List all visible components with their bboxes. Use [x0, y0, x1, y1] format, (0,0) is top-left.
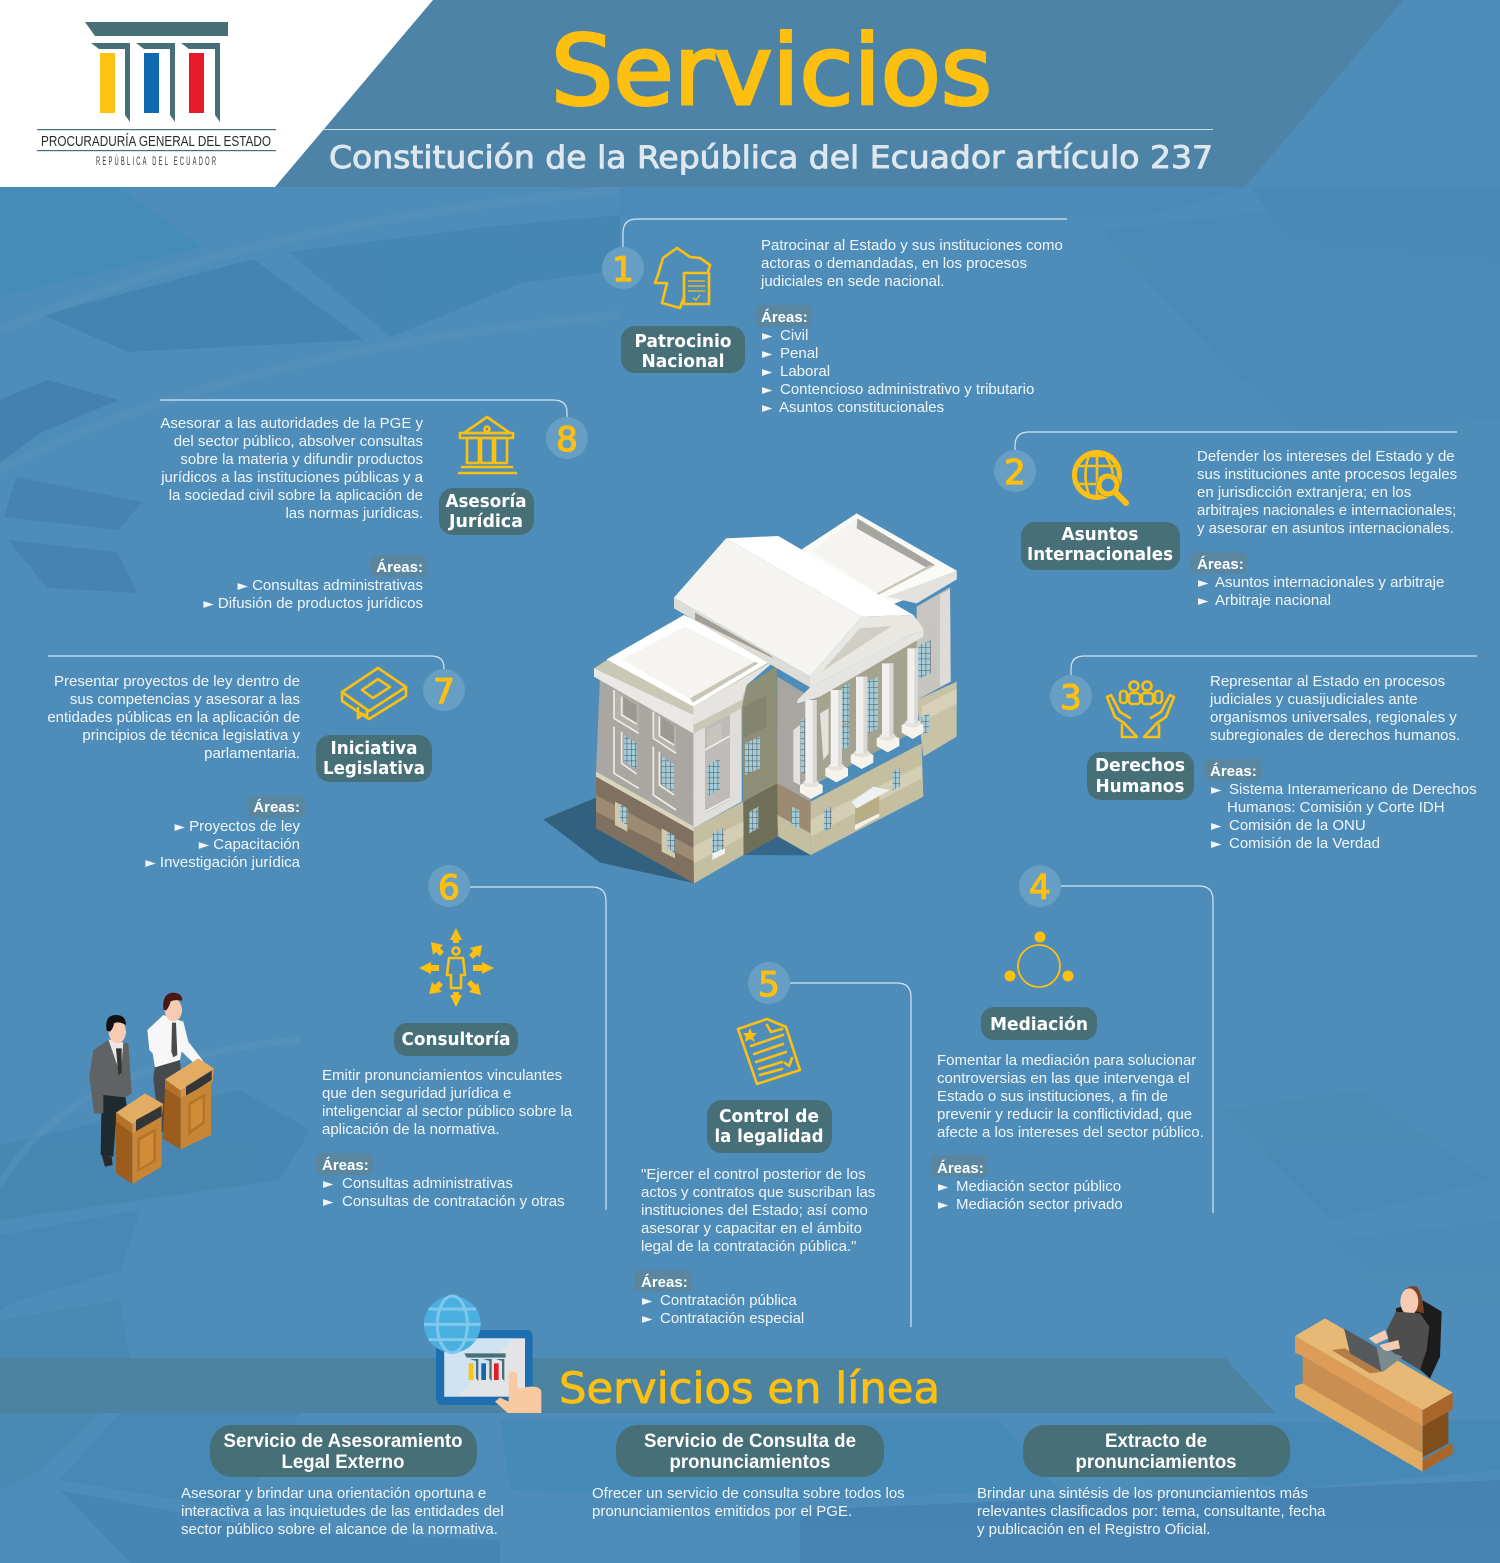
- number 7: 7: [433, 672, 455, 712]
- panel: Servicio de Consulta de pronunciamientos: Servicio de Consulta de: [644, 1431, 856, 1452]
- illustration: globe and tablet: [424, 1296, 541, 1413]
- heading: servicios en linea: Servicios en línea: [559, 1364, 940, 1414]
- areas chip: Áreas:: [376, 559, 423, 576]
- pill: Control de la legalidad: la legalidad: [714, 1126, 824, 1147]
- chair: [1396, 1301, 1442, 1378]
- areas list: ►: [642, 1311, 653, 1327]
- description: Patrocinar al Estado y sus instituciones como: [761, 237, 1063, 254]
- panel 6: Consultoría: [316, 865, 606, 1210]
- panel 1: Patrocinio Nacional: [602, 219, 1067, 416]
- logo: REPÚBLICA DEL ECUADOR: [96, 155, 216, 168]
- description: interactiva a las inquietudes de las entidades del: [181, 1503, 504, 1520]
- pill: Patrocinio Nacional: Patrocinio: [634, 331, 732, 352]
- description: Ofrecer un servicio de consulta sobre todos los: [592, 1485, 905, 1502]
- panel 2: Asuntos Internacionales: [994, 432, 1457, 609]
- number 6: 6: [438, 868, 460, 908]
- title: Servicios: [551, 15, 992, 127]
- left front wall: [693, 707, 742, 828]
- left base: [596, 773, 694, 883]
- areas list: [1211, 781, 1477, 852]
- panel 7: Iniciativa Legislativa: [47, 656, 465, 871]
- portico walls: [777, 677, 811, 802]
- left roof: [594, 615, 776, 733]
- areas list: ►: [1211, 782, 1222, 798]
- description: Presentar proyectos de ley dentro de: [54, 673, 300, 690]
- description: la sociedad civil sobre la aplicación de: [169, 487, 423, 504]
- icon: law book: [342, 668, 406, 719]
- areas chip: [634, 1270, 692, 1292]
- icon: hands and people: [1107, 682, 1174, 737]
- number 1: 1: [612, 250, 634, 290]
- description: Asesorar a las autoridades de la PGE y: [160, 415, 423, 432]
- areas chip: [248, 796, 305, 818]
- areas chip: Áreas:: [322, 1157, 369, 1174]
- areas list: ► Difusión de productos jurídicos: [203, 595, 423, 612]
- illustration: two men at podiums: [89, 993, 214, 1184]
- pill: Asesoría Jurídica: [439, 488, 534, 535]
- description: judiciales y cuasijudiciales ante: [1209, 691, 1418, 708]
- recessed section: [742, 667, 777, 855]
- icon: mediation circle: [1004, 932, 1074, 987]
- areas chip: [931, 1155, 988, 1177]
- pill: Asuntos Internacionales: Asuntos: [1062, 524, 1138, 545]
- areas list: Humanos: Comisión y Corte IDH: [1227, 799, 1445, 816]
- areas chip: Áreas:: [761, 309, 808, 326]
- description: relevantes clasificados por: tema, consultante, fecha: [977, 1503, 1326, 1520]
- columns: [800, 648, 923, 799]
- description: controversias en las que intervenga el: [937, 1070, 1190, 1087]
- front base: [777, 783, 811, 855]
- areas list: ►: [938, 1197, 949, 1213]
- desk: [1303, 1356, 1423, 1458]
- areas list: ►: [762, 400, 773, 416]
- pill: Derechos Humanos: [1087, 752, 1194, 800]
- areas list: [145, 818, 301, 871]
- description: [1197, 448, 1457, 537]
- pill: Asuntos Internacionales: Internacionales: [1027, 544, 1173, 565]
- areas list: Contencioso administrativo y tributario: [780, 381, 1034, 398]
- areas list: Sistema Interamericano de Derechos: [1229, 781, 1477, 798]
- description: [181, 1485, 504, 1538]
- areas chip: Áreas:: [937, 1160, 984, 1177]
- description: prevenir y reducir la conflictividad, que: [937, 1106, 1192, 1123]
- illustration: courthouse building: [543, 513, 957, 883]
- areas list: [323, 1175, 565, 1210]
- description: pronunciamientos emitidos por el PGE.: [592, 1503, 852, 1520]
- areas chip: Áreas:: [1197, 556, 1244, 573]
- areas list: ►: [762, 328, 773, 344]
- illustration: woman at reception desk: [1295, 1286, 1453, 1472]
- areas chip: [370, 555, 427, 577]
- areas list: Civil: [780, 327, 808, 344]
- description: Asesorar y brindar una orientación oportuna e: [181, 1485, 486, 1502]
- pill: Control de la legalidad: Control de: [719, 1106, 819, 1127]
- description: subregionales de derechos humanos.: [1210, 727, 1460, 744]
- panel: Servicio de Consulta de pronunciamientos: [592, 1425, 905, 1520]
- description: jurídicos a las instituciones públicas y a: [160, 469, 424, 486]
- areas list: Contratación pública: [660, 1292, 797, 1309]
- panel: Servicio de Asesoramiento Legal Externo: [181, 1425, 504, 1538]
- woman: [1369, 1286, 1429, 1370]
- number 4: 4: [1029, 868, 1051, 908]
- front podium: [116, 1093, 163, 1184]
- areas list: ►: [1211, 818, 1222, 834]
- description: del sector público, absolver consultas: [174, 433, 423, 450]
- description: afecte a los intereses del sector público.: [937, 1124, 1204, 1141]
- pill: Asesoría Jurídica: Jurídica: [447, 511, 523, 532]
- panel: Servicio de Asesoramiento Legal Externo: Legal Externo: [282, 1452, 404, 1473]
- description: sus competencias y asesorar a las: [70, 691, 300, 708]
- areas list: ► Consultas administrativas: [238, 577, 423, 594]
- description: Estado o sus instituciones, a fin de: [937, 1088, 1168, 1105]
- man in white shirt: [147, 993, 205, 1133]
- number 8: 8: [556, 420, 578, 460]
- description: [592, 1485, 905, 1520]
- areas chip: [755, 305, 812, 327]
- areas list: Penal: [780, 345, 818, 362]
- description: sobre la materia y difundir productos: [180, 451, 423, 468]
- man in grey suit: [89, 1015, 132, 1167]
- icon: globe and magnifier: [1074, 452, 1126, 503]
- panel 5: Control de la legalidad: [634, 962, 911, 1327]
- description: Emitir pronunciamientos vinculantes: [322, 1067, 562, 1084]
- panel: Extracto de pronunciamientos: pronunciamientos: [1076, 1452, 1236, 1473]
- header band: [275, 0, 1403, 187]
- pill: Asesoría Jurídica: Asesoría: [446, 491, 526, 512]
- description: Representar al Estado en procesos: [1210, 673, 1445, 690]
- description: que den seguridad jurídica e: [322, 1085, 511, 1102]
- description: principios de técnica legislativa y: [82, 727, 300, 744]
- areas list: Laboral: [780, 363, 830, 380]
- description: [937, 1052, 1204, 1141]
- rear podium: [163, 1058, 214, 1149]
- left wall: [596, 677, 693, 828]
- description: actos y contratos que suscriban las: [641, 1184, 875, 1201]
- description: Defender los intereses del Estado y de: [1197, 448, 1455, 465]
- areas list: ► Proyectos de ley: [175, 818, 300, 835]
- areas list: ► Capacitación: [199, 836, 300, 853]
- areas chip: Áreas:: [641, 1274, 688, 1291]
- areas list: ►: [762, 364, 773, 380]
- pill: Asuntos Internacionales: [1021, 522, 1180, 570]
- pill: Mediación: [981, 1007, 1097, 1040]
- areas chip: Áreas:: [253, 799, 300, 816]
- description: y publicación en el Registro Oficial.: [977, 1521, 1210, 1538]
- areas list: ►: [1211, 836, 1222, 852]
- description: parlamentaria.: [204, 745, 300, 762]
- pill: Iniciativa Legislativa: [316, 735, 432, 782]
- description: [160, 415, 424, 522]
- description: entidades públicas en la aplicación de: [47, 709, 300, 726]
- laptop: [1344, 1328, 1382, 1372]
- number 3: 3: [1060, 678, 1082, 718]
- areas list: Mediación sector público: [956, 1178, 1121, 1195]
- pill: Consultoría: Consultoría: [402, 1029, 510, 1050]
- description: [47, 673, 300, 762]
- areas list: ►: [762, 382, 773, 398]
- description: "Ejercer el control posterior de los: [641, 1166, 866, 1183]
- description: judiciales en sede nacional.: [760, 273, 944, 290]
- number 5: 5: [758, 965, 780, 1005]
- description: en jurisdicción extranjera; en los: [1197, 484, 1411, 501]
- areas list: [762, 327, 1034, 416]
- panel: Extracto de pronunciamientos: [977, 1425, 1326, 1538]
- description: y asesorar en asuntos internacionales.: [1197, 520, 1454, 537]
- right rear wing: [917, 587, 951, 700]
- description: actoras o demandadas, en los procesos: [761, 255, 1027, 272]
- areas list: Mediación sector privado: [956, 1196, 1123, 1213]
- servicios en linea band: [0, 1358, 1275, 1413]
- logo: [37, 22, 276, 168]
- areas list: [203, 577, 423, 612]
- pill: Derechos Humanos: Derechos: [1095, 755, 1185, 776]
- description: [322, 1067, 573, 1138]
- pill: Patrocinio Nacional: Nacional: [642, 351, 724, 372]
- description: [641, 1166, 875, 1255]
- logo: PROCURADURÍA GENERAL DEL ESTADO: [41, 133, 271, 150]
- areas list: Arbitraje nacional: [1215, 592, 1331, 609]
- description: asesorar y capacitar en el ámbito: [641, 1220, 862, 1237]
- subtitle: Constitución de la República del Ecuador artículo 237: [329, 140, 1213, 176]
- areas list: [938, 1178, 1123, 1213]
- panel 3: Derechos Humanos: [1050, 656, 1477, 852]
- areas list: ►: [323, 1194, 334, 1210]
- description: arbitrajes nacionales e internacionales;: [1197, 502, 1456, 519]
- panel: Servicio de Asesoramiento Legal Externo: Servicio de Asesoramiento: [224, 1431, 462, 1452]
- areas list: ►: [323, 1176, 334, 1192]
- areas list: Consultas administrativas: [342, 1175, 513, 1192]
- description: [1209, 673, 1460, 744]
- areas chip: [1204, 759, 1262, 781]
- description: inteligenciar al sector público sobre la: [322, 1103, 573, 1120]
- areas chip: Áreas:: [1210, 763, 1257, 780]
- panel 4: Mediación: [931, 865, 1213, 1213]
- description: Brindar una sintésis de los pronunciamientos más: [977, 1485, 1308, 1502]
- areas list: [642, 1292, 804, 1327]
- description: [760, 237, 1063, 290]
- pill: Control de la legalidad: [707, 1100, 832, 1153]
- areas list: Consultas de contratación y otras: [342, 1193, 565, 1210]
- entablature and pediment: [797, 628, 923, 703]
- title divider: [322, 129, 1213, 130]
- areas list: Contratación especial: [660, 1310, 804, 1327]
- pill: Mediación: Mediación: [990, 1014, 1088, 1035]
- header white logo panel: [0, 0, 433, 187]
- areas list: [1198, 574, 1444, 609]
- description: legal de la contratación pública.": [641, 1238, 856, 1255]
- number 2: 2: [1004, 453, 1026, 493]
- areas list: Comisión de la Verdad: [1229, 835, 1380, 852]
- areas list: ► Investigación jurídica: [145, 854, 301, 871]
- icon: institution: [459, 417, 516, 473]
- description: instituciones del Estado; así como: [641, 1202, 868, 1219]
- areas list: ►: [642, 1293, 653, 1309]
- areas list: Asuntos constitucionales: [779, 399, 944, 416]
- description: sector público sobre el alcance de la normativa.: [181, 1521, 498, 1538]
- areas list: Asuntos internacionales y arbitraje: [1215, 574, 1444, 591]
- icon: map and document: [655, 248, 710, 308]
- areas list: ►: [762, 346, 773, 362]
- panel: Servicio de Consulta de pronunciamientos: pronunciamientos: [670, 1452, 830, 1473]
- areas chip: [1190, 552, 1247, 574]
- description: Fomentar la mediación para solucionar: [937, 1052, 1196, 1069]
- pill: Iniciativa Legislativa: Iniciativa: [330, 738, 418, 759]
- description: las normas jurídicas.: [285, 505, 423, 522]
- description: organismos universales, regionales y: [1210, 709, 1457, 726]
- description: aplicación de la normativa.: [322, 1121, 500, 1138]
- pill: Patrocinio Nacional: [621, 326, 745, 373]
- areas list: ►: [1198, 593, 1209, 609]
- panel: Extracto de pronunciamientos: Extracto de: [1105, 1431, 1207, 1452]
- pill: Iniciativa Legislativa: Legislativa: [323, 758, 425, 779]
- areas chip: [316, 1153, 374, 1175]
- description: [977, 1485, 1326, 1538]
- description: sus instituciones ante procesos legales: [1197, 466, 1457, 483]
- pill: Derechos Humanos: Humanos: [1096, 776, 1184, 797]
- areas list: ►: [938, 1179, 949, 1195]
- shadow: [543, 798, 695, 883]
- icon: person with arrows: [419, 928, 494, 1007]
- pill: Consultoría: [394, 1023, 518, 1056]
- panel 8: Asesoría Jurídica: [160, 400, 588, 612]
- areas list: ►: [1198, 575, 1209, 591]
- icon: document with star: [738, 1019, 800, 1084]
- areas list: Comisión de la ONU: [1229, 817, 1366, 834]
